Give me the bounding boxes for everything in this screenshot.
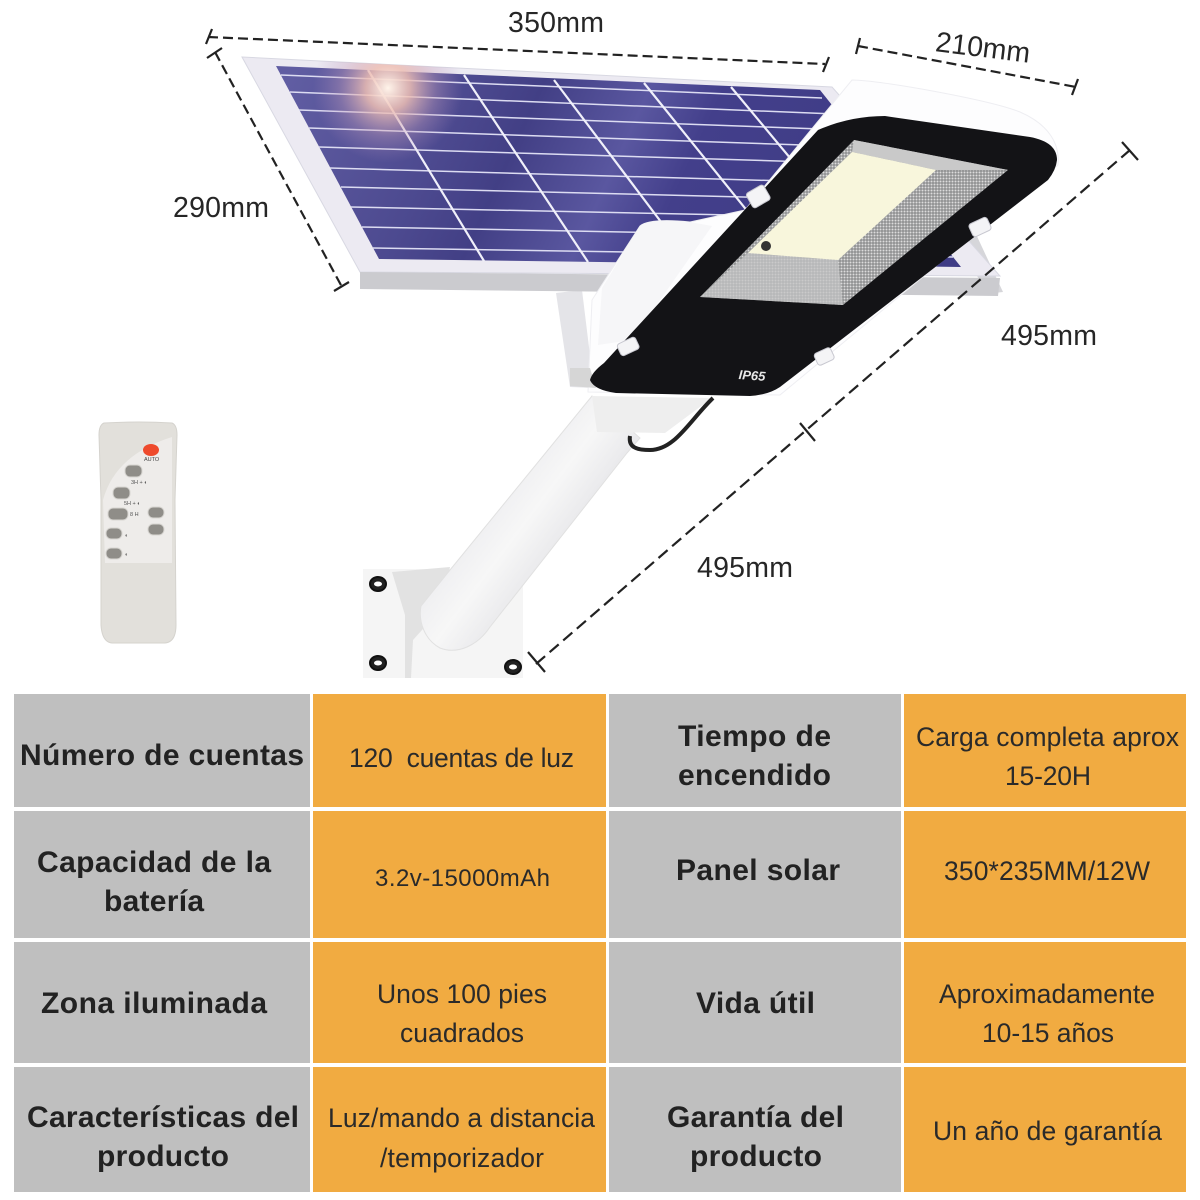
row 3 text: Unos 100 pies	[377, 979, 547, 1009]
row 4 text: /temporizador	[380, 1143, 544, 1173]
row 1 text: 120 cuentas de luz	[349, 743, 574, 773]
bolt highlights	[374, 582, 517, 670]
dimension lines	[206, 29, 1138, 672]
dimension label 495mm lower: 495mm	[697, 552, 793, 584]
remote labels: ◐	[125, 552, 129, 558]
remote face	[103, 437, 172, 563]
black plate	[590, 116, 1057, 396]
panel right support	[960, 232, 1003, 294]
row 3 text: 10-15 años	[982, 1018, 1114, 1048]
depth line 210mm	[856, 38, 1078, 95]
row 1 text: 15-20H	[1005, 761, 1091, 791]
lamp pole	[363, 396, 713, 678]
specification table	[14, 694, 1186, 1192]
remote labels	[124, 457, 160, 558]
dimension label 210mm: 210mm	[934, 26, 1032, 70]
row 3 text	[41, 979, 1155, 1048]
row 4 text: Características del	[27, 1101, 299, 1134]
row 2 text: batería	[104, 885, 204, 918]
upper bracket	[592, 396, 712, 433]
height line 290mm	[207, 48, 349, 291]
row 1 text: Número de cuentas	[20, 739, 304, 772]
row 4 text	[27, 1101, 1162, 1173]
solar panel	[241, 56, 1003, 388]
row 4 text: Un año de garantía	[933, 1116, 1162, 1146]
bracket fold	[392, 567, 450, 678]
row 4 text: Garantía del	[667, 1101, 844, 1134]
dimension label 495mm right: 495mm	[1001, 320, 1097, 352]
row 3 text: Vida útil	[696, 987, 815, 1020]
remote body	[99, 422, 177, 643]
mounting clips	[616, 184, 992, 366]
auto button	[143, 444, 159, 456]
remote labels: 3H + ◐	[131, 480, 148, 486]
panel frame	[242, 57, 1000, 276]
panel mounting arm	[556, 290, 594, 388]
width line 350mm	[206, 29, 829, 72]
sun glare	[320, 62, 457, 157]
reflector	[700, 140, 1008, 305]
panel front edge	[360, 272, 1000, 296]
dimension label 350mm: 350mm	[508, 7, 604, 39]
solar cells	[276, 66, 961, 267]
row 3 text: Aproximadamente	[939, 979, 1155, 1009]
LED array	[748, 152, 936, 260]
length line 495mm	[528, 142, 1138, 672]
row 4 text: Luz/mando a distancia	[328, 1103, 595, 1133]
row 3 text: Zona iluminada	[41, 987, 267, 1020]
side shading	[598, 221, 712, 345]
row 2 text: Capacidad de la	[37, 846, 271, 879]
IP65 mark: IP65	[738, 367, 767, 384]
reflector upper band	[852, 140, 1008, 170]
remote control	[99, 422, 177, 643]
cable	[630, 398, 713, 450]
reflector lower band	[700, 253, 843, 305]
remote labels: 5H + ◐	[124, 501, 141, 507]
row 4 text: producto	[690, 1140, 822, 1173]
sensor	[761, 241, 771, 251]
dimension label 290mm: 290mm	[173, 192, 269, 224]
lamp head	[570, 80, 1058, 396]
wall bracket plate	[363, 569, 523, 678]
row 1 text: encendido	[678, 759, 831, 792]
remote labels: ◐	[125, 533, 129, 539]
remote labels: AUTO	[144, 457, 160, 463]
row 2 text: 350*235MM/12W	[944, 856, 1150, 886]
row 3 text: cuadrados	[400, 1018, 524, 1048]
row 2 text: 3.2v-15000mAh	[375, 865, 550, 892]
remote labels: 8 H	[130, 512, 139, 518]
row 2 text	[37, 846, 1150, 918]
row 1 text: Carga completa aprox	[916, 722, 1179, 752]
white housing	[588, 80, 1058, 395]
table cells	[14, 694, 1186, 1192]
row 4 text: producto	[97, 1140, 229, 1173]
row 2 text: Panel solar	[676, 854, 840, 887]
row 1 text	[20, 720, 1179, 792]
bolts	[370, 577, 521, 674]
remote buttons	[106, 465, 164, 559]
pole tube	[420, 396, 640, 650]
lower shade	[570, 368, 596, 388]
row 1 text: Tiempo de	[678, 720, 831, 753]
cell grid	[281, 70, 953, 266]
